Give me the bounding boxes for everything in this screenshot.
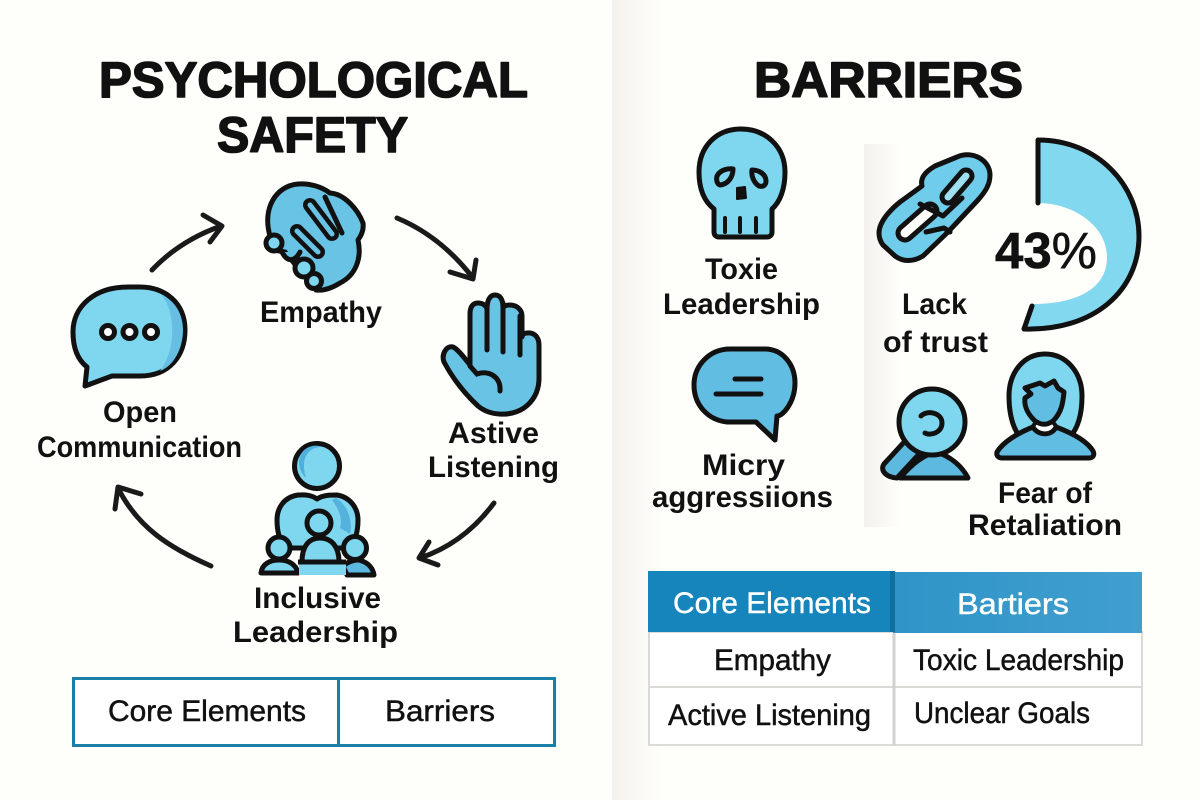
label: open communication <box>37 396 242 464</box>
table: core elements and barriers key <box>74 678 554 746</box>
arrow: communication to empathy <box>152 215 222 270</box>
label: fear of retaliation: Retaliation <box>968 509 1122 542</box>
arrow: leadership to communication <box>115 487 211 566</box>
icon: inclusive leadership group <box>261 444 374 575</box>
label: toxic leadership: Toxie <box>705 253 778 286</box>
icon: raised hand <box>443 295 539 414</box>
table: core elements and barriers key: Core Elements <box>108 695 306 728</box>
icon: magnifier and person <box>883 389 968 478</box>
panel: psychological safety <box>37 52 559 746</box>
label: active listening <box>428 417 559 484</box>
label: fear of retaliation: Fear of <box>998 477 1093 510</box>
title: psychological safety: PSYCHOLOGICAL <box>99 52 528 108</box>
table header: core elements <box>648 571 893 632</box>
icon: empathy hands <box>266 184 363 290</box>
table: core elements and barriers key: Barriers <box>385 695 495 728</box>
table: core elements versus barriers <box>648 571 1142 745</box>
table cells: Toxic Leadership <box>913 644 1124 677</box>
table header: barriers: Bartiers <box>957 588 1069 621</box>
label: fear of retaliation <box>968 477 1122 542</box>
label: inclusive leadership: Leadership <box>233 616 398 649</box>
table header: core elements: Core Elements <box>673 587 871 620</box>
label: open communication: Communication <box>37 431 242 464</box>
arrow: listening to leadership <box>419 503 494 565</box>
label: microaggressions: Micry <box>702 449 785 482</box>
icon: chain link <box>879 155 990 260</box>
icon: speech bubble with lines <box>694 349 795 440</box>
label: active listening: Listening <box>428 451 559 484</box>
label: inclusive leadership <box>233 582 398 649</box>
label: inclusive leadership: Inclusive <box>254 582 381 615</box>
label: empathy: Empathy <box>260 296 382 329</box>
label: open communication: Open <box>103 396 177 429</box>
value: 43%: 43% <box>995 222 1097 279</box>
label: microaggressions <box>652 449 833 514</box>
chart: 43% gauge <box>995 140 1139 329</box>
label: toxic leadership <box>663 253 820 321</box>
title: psychological safety: SAFETY <box>217 107 408 163</box>
table cells: Empathy <box>714 644 831 677</box>
label: toxic leadership: Leadership <box>663 288 820 321</box>
icon: speech bubble with dots <box>73 287 185 386</box>
icon: skull <box>699 129 785 237</box>
table cells: Active Listening <box>668 699 871 732</box>
table cells: Unclear Goals <box>914 697 1090 730</box>
label: lack of trust: Lack <box>902 288 967 321</box>
table cells <box>668 644 1124 732</box>
label: lack of trust: of trust <box>883 326 988 359</box>
icon: person fear of retaliation <box>997 354 1094 458</box>
label: active listening: Astive <box>448 417 539 450</box>
label: lack of trust <box>883 288 988 359</box>
title: psychological safety <box>99 52 528 163</box>
table header: barriers <box>890 571 1142 633</box>
title: barriers: BARRIERS <box>754 52 1023 108</box>
label: microaggressions: aggressiions <box>652 481 833 514</box>
panel: barriers <box>648 52 1142 745</box>
arrow: empathy to listening <box>397 218 476 279</box>
